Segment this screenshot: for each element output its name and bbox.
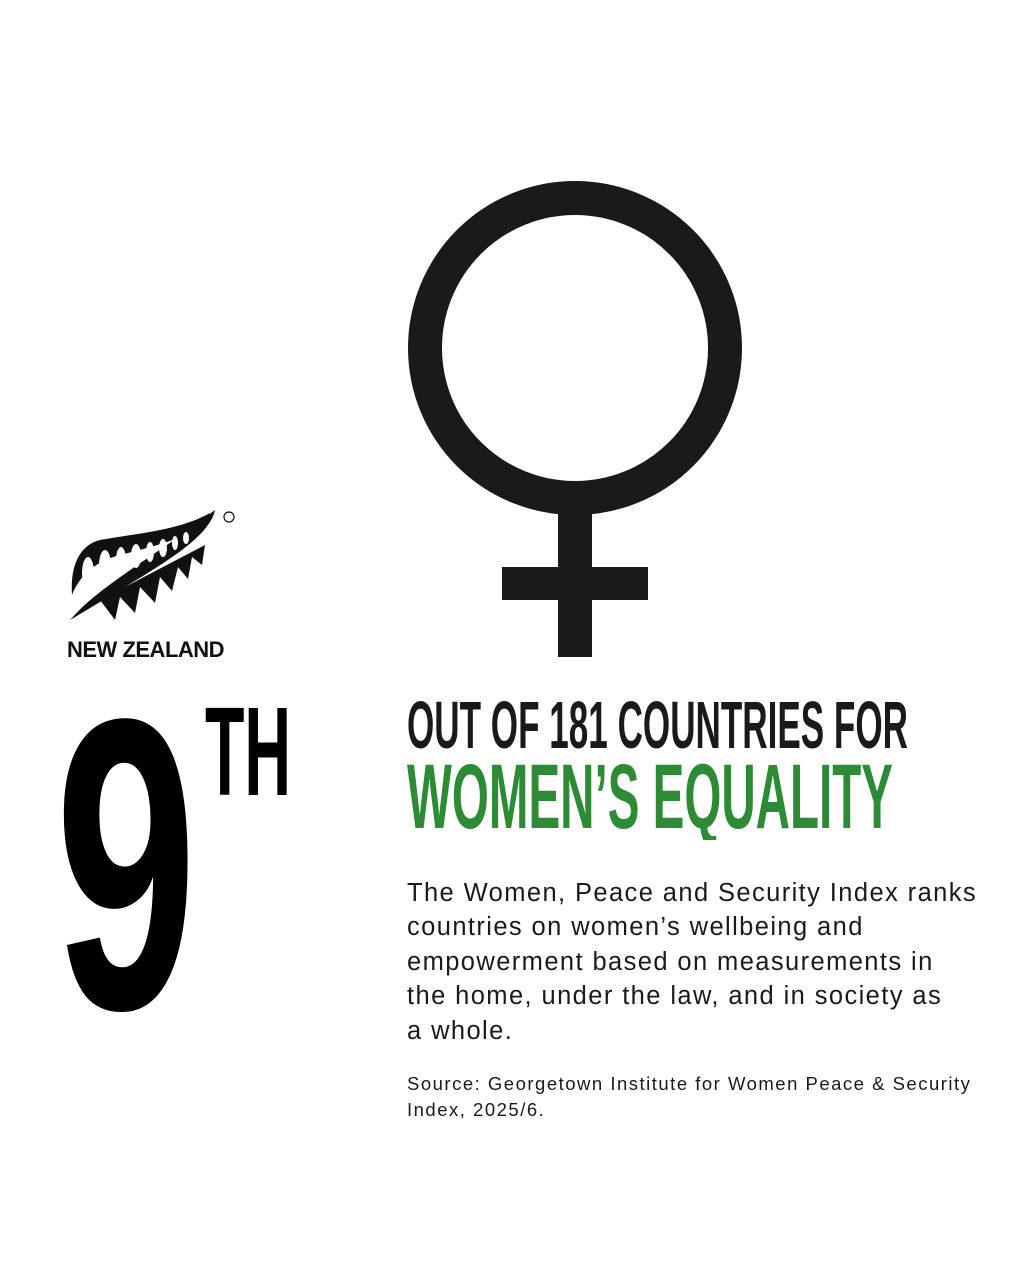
source [407,1073,971,1120]
body text: the home, under the law, and in society as [407,982,942,1010]
body text [407,879,977,1045]
source: Index, 2025/6. [407,1099,545,1120]
headline [407,690,908,840]
body text: a whole. [407,1017,513,1045]
body text: The Women, Peace and Security Index ranks [407,879,977,907]
logo: New Zealand fern [70,510,235,620]
body text: countries on women’s wellbeing and [407,913,864,941]
source: Source: Georgetown Institute for Women Peace & Security [407,1073,971,1094]
body text: empowerment based on measurements in [407,948,934,976]
logo text: NEW ZEALAND [67,637,224,662]
